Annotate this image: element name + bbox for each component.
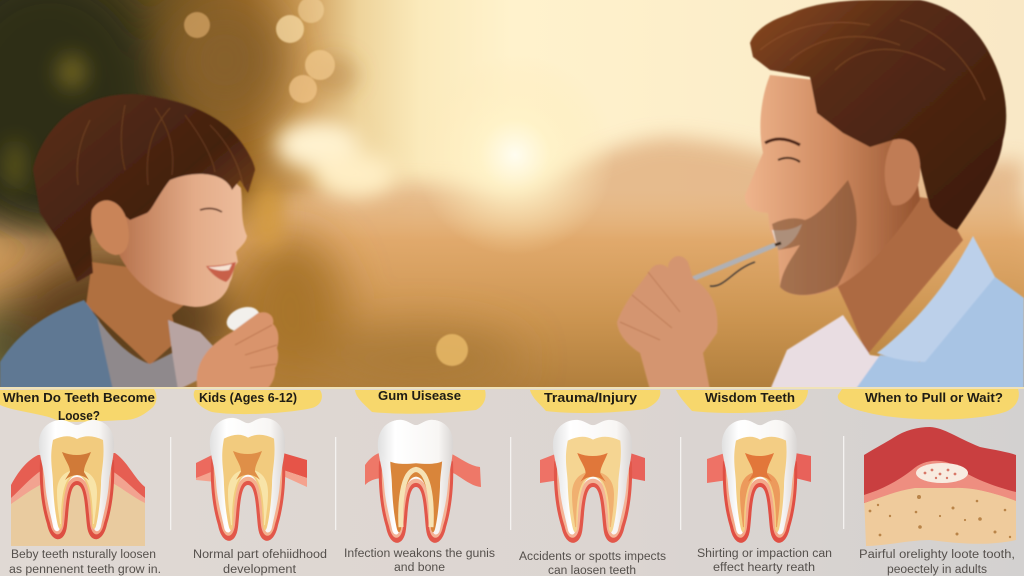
exposed tooth fragments	[916, 463, 968, 483]
illustration: child in profile	[0, 94, 278, 390]
jaw bone	[11, 470, 145, 546]
caption: when to pull or wait: Pairful orelighty loote tooth,	[859, 549, 1015, 561]
man hair strands	[760, 20, 985, 100]
man brow	[765, 139, 800, 145]
man shirt right side	[855, 277, 1024, 390]
heading: Wisdom Teeth: Wisdom Teeth	[705, 390, 795, 405]
caption: wisdom teeth: Shirting or impaction can	[697, 548, 832, 560]
child smile	[206, 262, 236, 282]
man beard stubble	[772, 180, 857, 295]
heading: When Do Teeth Become Loose?: When Do Teeth Become	[3, 390, 155, 405]
child hair	[33, 94, 255, 282]
child over-shirt	[0, 300, 115, 390]
setting sun glow	[415, 55, 615, 255]
caption: gum disease	[344, 548, 495, 574]
man hand	[617, 256, 718, 390]
gum	[11, 453, 145, 498]
child eye	[200, 208, 222, 212]
white tooth held by child	[223, 302, 263, 336]
heading: Trauma/Injury: Trauma/Injury	[544, 390, 638, 405]
caption: wisdom teeth	[697, 548, 832, 574]
heading: When to Pull or Wait?	[838, 389, 1019, 419]
diagram: tooth, wisdom teeth	[707, 420, 811, 543]
dental tool in man's hand	[678, 243, 781, 286]
caption: gum disease: and bone	[394, 562, 445, 574]
bone speckles	[869, 495, 1011, 538]
caption: baby teeth: Beby teeth nsturally loosen	[11, 549, 156, 561]
heading: When to Pull or Wait?: When to Pull or Wait?	[865, 390, 1003, 405]
man eye	[778, 158, 800, 162]
caption: baby teeth	[9, 549, 161, 576]
caption: trauma	[519, 551, 666, 576]
heading: Wisdom Teeth	[676, 390, 808, 413]
man face	[745, 75, 920, 295]
bone	[864, 482, 1016, 546]
gum tissue	[864, 427, 1016, 503]
caption: when to pull or wait	[859, 549, 1015, 576]
man hair	[750, 0, 1006, 230]
man shirt body	[770, 277, 1024, 390]
illustration: man in profile	[617, 0, 1024, 390]
man smile	[772, 224, 802, 250]
distant hills	[280, 138, 1024, 390]
gum bands	[196, 453, 216, 478]
child grey t-shirt	[97, 318, 178, 390]
diagram: tooth, gum disease	[365, 420, 481, 543]
caption: gum disease: Infection weakons the gunis	[344, 548, 495, 560]
heading: Kids (Ages 6-12): Kids (Ages 6-12)	[199, 390, 297, 405]
child hand	[197, 312, 278, 390]
diagram: tooth, trauma or injury	[540, 420, 645, 543]
heading: Kids (Ages 6-12)	[194, 390, 322, 414]
diagram: tooth with bone, baby teeth	[11, 420, 145, 546]
heading: When Do Teeth Become Loose?: Loose?	[58, 408, 100, 423]
caption: when to pull or wait: peoectely in adults	[887, 564, 987, 576]
heading: Gum Disease: Gum Uisease	[378, 388, 461, 403]
child teeth	[208, 264, 232, 271]
man shirt collar	[877, 236, 995, 362]
bokeh circles	[184, 0, 468, 366]
child shirt shoulder	[168, 320, 213, 390]
caption: kids: development	[223, 564, 297, 576]
diagram: gum cross-section	[864, 427, 1016, 546]
heading: When Do Teeth Become Loose?	[0, 389, 156, 423]
caption: kids: Normal part ofehiidhood	[193, 549, 327, 561]
caption: kids	[193, 549, 327, 576]
heading: Gum Disease	[355, 388, 486, 414]
child neck	[86, 262, 190, 365]
man neck	[830, 190, 963, 355]
child ear	[91, 200, 129, 255]
child hair strands	[77, 105, 243, 185]
diagram: tooth, kids	[196, 418, 307, 541]
panel: sunset photo background	[0, 0, 1024, 390]
tooth	[39, 420, 114, 539]
caption: baby teeth: as pennenent teeth grow in.	[9, 564, 161, 576]
caption: trauma: Accidents or spotts impects	[519, 551, 666, 563]
child face	[115, 173, 247, 307]
heading: Trauma/Injury	[530, 390, 660, 413]
caption: wisdom teeth: effect hearty reath	[713, 562, 815, 574]
man ear	[885, 139, 920, 205]
tree foliage at left	[0, 0, 520, 390]
panel: information strip	[0, 387, 1024, 576]
